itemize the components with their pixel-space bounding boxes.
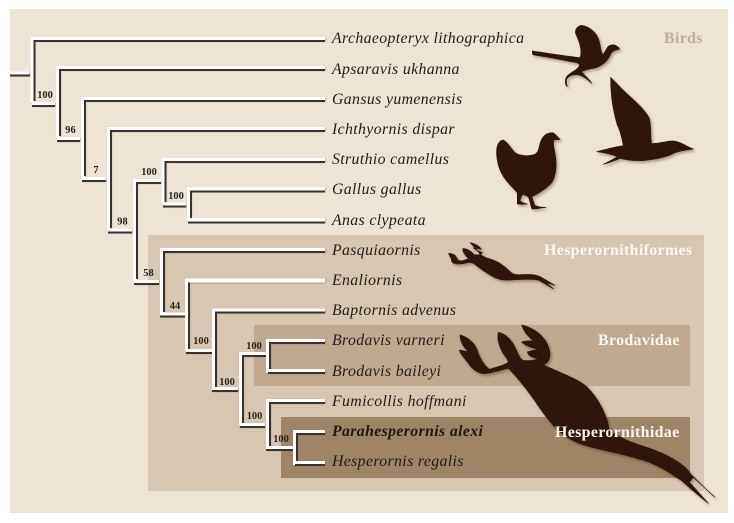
- group label: Birds: Birds: [664, 30, 703, 47]
- group label: Hesperornithidae: Hesperornithidae: [555, 424, 680, 441]
- branch support values: 100: [193, 336, 209, 347]
- icon: gull silhouette: [597, 77, 693, 164]
- branch support values: 7: [93, 165, 99, 176]
- taxon labels: Fumicollis hoffmani: [331, 393, 467, 410]
- icon: large Hesperornis silhouette: [459, 325, 715, 503]
- taxon labels: Pasquiaornis: [331, 242, 421, 259]
- branch support values: 44: [170, 301, 180, 312]
- phylogenetic tree branches: [10, 39, 325, 465]
- taxon labels: Apsaravis ukhanna: [331, 61, 460, 78]
- branch support values: 100: [37, 90, 53, 101]
- taxon labels: Parahesperornis alexi: [332, 423, 484, 440]
- branch support values: 100: [273, 434, 289, 445]
- panel: Hesperornithiformes: [148, 235, 704, 491]
- icon: small swimming bird silhouette: [449, 243, 555, 289]
- taxon labels: Brodavis baileyi: [332, 363, 441, 380]
- icon: long-tailed bird silhouette: [532, 25, 620, 87]
- taxon labels: Baptornis advenus: [332, 302, 456, 319]
- branch support values: 100: [247, 411, 262, 422]
- group label: Hesperornithiformes: Hesperornithiformes: [544, 242, 692, 259]
- taxon labels: Gansus yumenensis: [332, 91, 462, 108]
- taxon labels: Brodavis varneri: [332, 332, 445, 349]
- branch support values: 98: [117, 216, 128, 228]
- panel: Hesperornithidae: [281, 417, 690, 478]
- branch support values: [37, 90, 289, 445]
- branch support values: 100: [246, 341, 262, 352]
- group label: Brodavidae: Brodavidae: [598, 332, 680, 349]
- taxon labels: [331, 30, 524, 470]
- taxon labels: Ichthyornis dispar: [331, 121, 455, 138]
- taxon labels: Archaeopteryx lithographica: [331, 30, 524, 47]
- taxon labels: Hesperornis regalis: [331, 453, 464, 470]
- icon: chicken silhouette: [497, 133, 560, 209]
- taxon labels: Enaliornis: [331, 272, 402, 289]
- branch support values: 100: [219, 377, 235, 388]
- branch support values: 100: [168, 191, 184, 202]
- panel: Brodavidae: [254, 325, 690, 386]
- taxon labels: Gallus gallus: [332, 181, 422, 198]
- branch support values: 100: [141, 167, 157, 178]
- branch support values: 58: [143, 268, 154, 279]
- branch support values: 96: [65, 125, 76, 136]
- taxon labels: Struthio camellus: [332, 151, 449, 168]
- taxon labels: Anas clypeata: [331, 212, 426, 229]
